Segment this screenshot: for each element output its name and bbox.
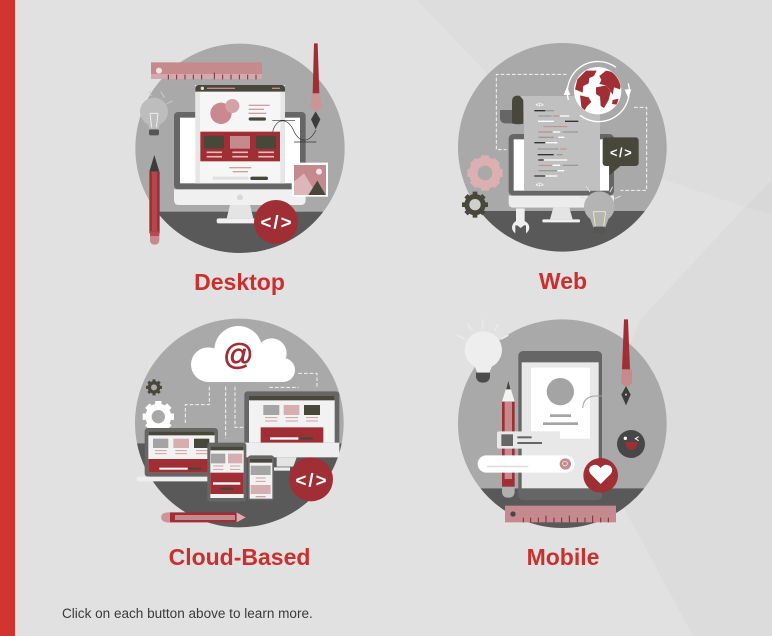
dashed connectors xyxy=(185,373,317,438)
profile card xyxy=(497,431,560,449)
code scroll xyxy=(500,96,600,191)
icon: wrench xyxy=(512,208,529,233)
panel: web xyxy=(458,43,667,252)
web circle xyxy=(458,43,667,252)
code scroll: </> xyxy=(536,102,544,108)
icon: dark gear xyxy=(462,192,488,218)
laptop xyxy=(137,428,218,481)
panel: cloud-based xyxy=(135,318,344,528)
cloud circle xyxy=(135,318,344,528)
icon: gear small xyxy=(146,379,162,395)
icon: light bulb xyxy=(580,186,621,233)
heading: web: Web xyxy=(539,268,587,294)
icon: pencil xyxy=(149,155,160,245)
dashed connectors xyxy=(496,74,647,190)
icon: brush pen xyxy=(310,43,322,129)
speech bubble code xyxy=(603,137,639,175)
desktop circle xyxy=(135,44,345,253)
desktop monitor xyxy=(244,391,339,471)
icon: light bulb xyxy=(140,91,173,135)
code badge: </> xyxy=(296,469,328,490)
icon: cloud: @ xyxy=(223,338,254,371)
instruction text: Click on each button above to learn more. xyxy=(62,606,313,621)
icon: pink gear xyxy=(467,155,503,191)
search bar xyxy=(478,455,575,473)
icon: gear white xyxy=(143,401,174,432)
icon: cloud xyxy=(191,326,295,382)
icon: emoji xyxy=(617,430,645,458)
heart badge xyxy=(583,458,618,493)
icon: phone xyxy=(518,351,602,500)
heading: desktop: Desktop xyxy=(194,269,285,295)
bezier curve xyxy=(272,120,316,142)
speech bubble code: </> xyxy=(610,146,633,160)
code badge xyxy=(254,200,298,244)
phone xyxy=(248,455,274,501)
tablet xyxy=(207,443,246,502)
icon: monitor xyxy=(509,134,614,222)
panel: mobile xyxy=(458,319,667,528)
mobile circle xyxy=(458,319,667,528)
code badge: </> xyxy=(261,212,293,233)
code scroll: </> xyxy=(536,182,544,188)
code badge xyxy=(289,457,333,501)
icon: globe xyxy=(564,61,631,122)
icon: ruler xyxy=(505,506,616,522)
icon: ruler xyxy=(151,62,262,79)
icon: brush pen xyxy=(621,319,632,405)
panel: desktop xyxy=(135,43,345,253)
heading: mobile: Mobile xyxy=(527,544,599,570)
icon: picture xyxy=(292,163,328,197)
icon: pencil xyxy=(161,512,246,522)
icon: monitor xyxy=(174,112,306,223)
web page mockup xyxy=(195,85,285,183)
icon: light bulb xyxy=(457,319,508,383)
red side bar xyxy=(0,0,15,636)
icon: pencil xyxy=(502,381,515,498)
heading: cloud-based: Cloud-Based xyxy=(169,544,310,570)
